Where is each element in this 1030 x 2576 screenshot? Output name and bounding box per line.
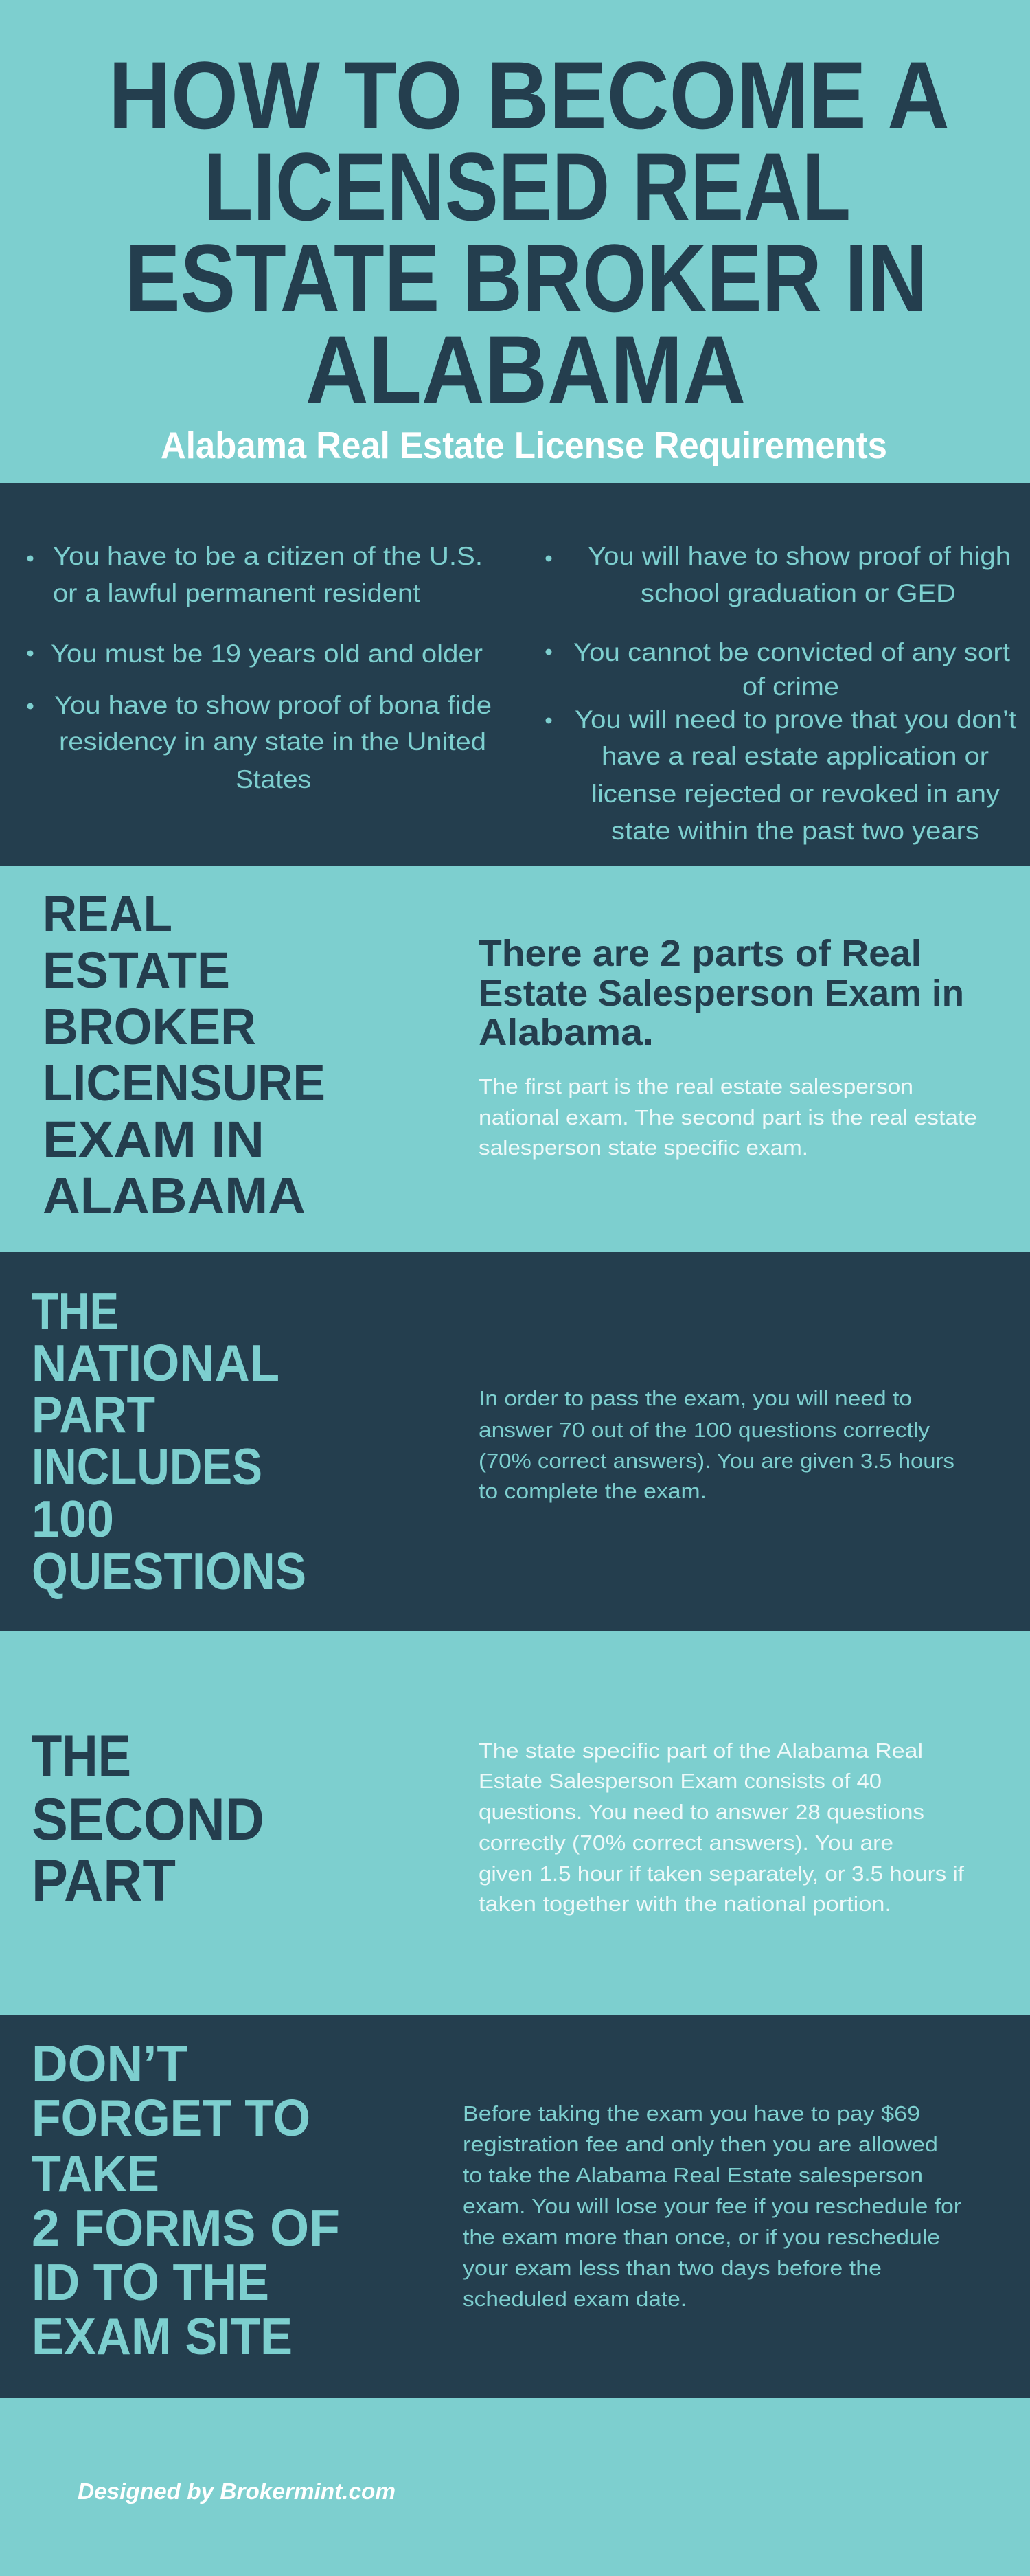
panel: licensure exam bbox=[0, 866, 1030, 1252]
heading: real estate broker licensure exam: LICENSURE bbox=[43, 1054, 325, 1111]
requirements left column: States bbox=[236, 765, 311, 793]
text: second part description: correctly (70% correct answers). You are bbox=[479, 1831, 893, 1855]
requirements left column: You have to show proof of bona fide bbox=[54, 691, 492, 719]
text: national part description: (70% correct answers). You are given 3.5 hours bbox=[479, 1449, 954, 1473]
text: two parts description: national exam. The second part is the real estate bbox=[479, 1105, 977, 1129]
requirements right column: You will need to prove that you don’t bbox=[575, 705, 1017, 734]
text: fee description: registration fee and only then you are allowed bbox=[463, 2132, 938, 2156]
heading: don't forget ID bbox=[32, 2035, 340, 2365]
heading: real estate broker licensure exam: ALABAMA bbox=[43, 1167, 306, 1224]
requirements right column: license rejected or revoked in any bbox=[591, 780, 1000, 808]
text: second part description: questions. You need to answer 28 questions bbox=[479, 1800, 924, 1824]
text: second part description bbox=[479, 1739, 964, 1916]
text: fee description: Before taking the exam you have to pay $69 bbox=[463, 2101, 920, 2125]
panel: second part bbox=[0, 1631, 1030, 2015]
requirements right column: state within the past two years bbox=[611, 817, 979, 845]
heading: second part: THE bbox=[32, 1724, 131, 1789]
heading: real estate broker licensure exam: EXAM IN bbox=[43, 1111, 264, 1168]
subtitle: Alabama Real Estate License Requirements bbox=[161, 424, 887, 466]
text: national part description: to complete the exam. bbox=[479, 1479, 707, 1503]
text: fee description bbox=[463, 2101, 961, 2311]
text: second part description: given 1.5 hour if taken separately, or 3.5 hours if bbox=[479, 1862, 964, 1886]
title: LICENSED REAL bbox=[204, 133, 851, 240]
subheading: 2 parts: There are 2 parts of Real bbox=[479, 933, 922, 974]
requirements left column bbox=[27, 542, 492, 793]
panel: header bbox=[0, 0, 1030, 483]
title: ESTATE BROKER IN bbox=[125, 224, 928, 332]
heading: real estate broker licensure exam: BROKER bbox=[43, 998, 256, 1055]
text: national part description bbox=[479, 1386, 954, 1503]
heading: second part bbox=[32, 1724, 264, 1914]
heading: national part: QUESTIONS bbox=[32, 1542, 306, 1600]
text: two parts description: salesperson state specific exam. bbox=[479, 1136, 808, 1160]
heading: national part: PART bbox=[32, 1386, 155, 1443]
text: fee description: scheduled exam date. bbox=[463, 2287, 687, 2311]
heading: real estate broker licensure exam bbox=[43, 885, 325, 1224]
text: second part description: Estate Salesperson Exam consists of 40 bbox=[479, 1769, 882, 1793]
heading: national part: NATIONAL bbox=[32, 1334, 279, 1392]
text: second part description: taken together with the national portion. bbox=[479, 1892, 891, 1916]
heading: don't forget ID: ID TO THE bbox=[32, 2253, 269, 2311]
requirements left column: You have to be a citizen of the U.S. bbox=[53, 542, 483, 570]
heading: second part: SECOND bbox=[32, 1787, 264, 1853]
footer credit: Designed by Brokermint.com bbox=[78, 2478, 396, 2504]
heading: don't forget ID: EXAM SITE bbox=[32, 2307, 293, 2365]
text: two parts description bbox=[479, 1074, 977, 1160]
title: HOW TO BECOME A bbox=[108, 41, 950, 149]
title bbox=[108, 41, 950, 423]
requirements right column: of crime bbox=[742, 673, 839, 701]
text: fee description: the exam more than once, or if you reschedule bbox=[463, 2225, 940, 2249]
text: second part description: The state specific part of the Alabama Real bbox=[479, 1739, 923, 1763]
heading: national part: THE bbox=[32, 1283, 119, 1340]
requirements left column: You must be 19 years old and older bbox=[51, 640, 483, 668]
panel: ID reminder bbox=[0, 2015, 1030, 2398]
heading: real estate broker licensure exam: REAL bbox=[43, 885, 172, 942]
requirements left column: or a lawful permanent resident bbox=[53, 579, 421, 607]
requirements right column bbox=[545, 542, 1017, 845]
requirements right column: You cannot be convicted of any sort bbox=[573, 638, 1011, 666]
heading: don't forget ID: 2 FORMS OF bbox=[32, 2199, 340, 2257]
heading: national part bbox=[32, 1283, 306, 1600]
requirements right column: You will have to show proof of high bbox=[588, 542, 1011, 570]
heading: national part: INCLUDES bbox=[32, 1438, 262, 1495]
subheading: 2 parts bbox=[479, 933, 964, 1053]
text: fee description: to take the Alabama Real Estate salesperson bbox=[463, 2163, 923, 2187]
panel: requirements bbox=[0, 483, 1030, 866]
requirements right column: school graduation or GED bbox=[641, 579, 956, 607]
text: national part description: In order to pass the exam, you will need to bbox=[479, 1386, 912, 1410]
heading: don't forget ID: FORGET TO bbox=[32, 2089, 310, 2147]
title: ALABAMA bbox=[306, 315, 746, 423]
heading: don't forget ID: TAKE bbox=[32, 2145, 159, 2202]
text: two parts description: The first part is the real estate salesperson bbox=[479, 1074, 913, 1098]
heading: real estate broker licensure exam: ESTATE bbox=[43, 942, 230, 999]
heading: don't forget ID: DON’T bbox=[32, 2035, 187, 2092]
subheading: 2 parts: Alabama. bbox=[479, 1012, 654, 1053]
requirements right column: have a real estate application or bbox=[602, 742, 989, 770]
requirements left column: residency in any state in the United bbox=[59, 727, 486, 756]
text: national part description: answer 70 out of the 100 questions correctly bbox=[479, 1418, 930, 1442]
heading: second part: PART bbox=[32, 1848, 176, 1914]
text: fee description: your exam less than two days before the bbox=[463, 2256, 882, 2280]
panel: national part bbox=[0, 1252, 1030, 1631]
subheading: 2 parts: Estate Salesperson Exam in bbox=[479, 973, 964, 1014]
heading: national part: 100 bbox=[32, 1490, 114, 1548]
text: fee description: exam. You will lose your fee if you reschedule for bbox=[463, 2194, 961, 2218]
